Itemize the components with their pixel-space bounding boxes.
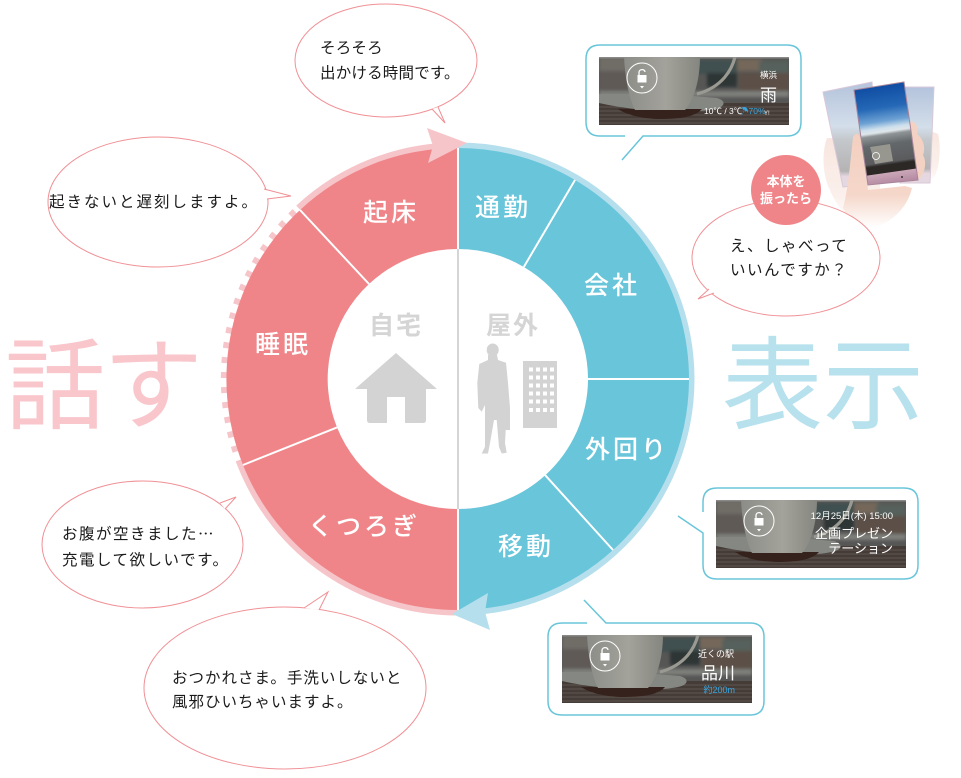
segment: 睡眠: 睡眠 <box>255 331 311 359</box>
ring: pink dashed sleep section <box>224 208 298 466</box>
segment: 移動: 移動 <box>498 533 554 561</box>
segment: 起床 <box>300 148 458 284</box>
callout: weather card: ☂70% <box>740 106 766 116</box>
icon: house <box>355 353 437 423</box>
icon: businessman <box>477 344 510 454</box>
ring: blue <box>458 146 692 612</box>
callout: station card: 近くの駅 <box>698 648 734 659</box>
bubble: そろそろ <box>295 4 477 123</box>
photo: hand holding phones <box>823 82 940 228</box>
arrow: top pink <box>427 128 467 163</box>
chart: daily cycle ring <box>224 128 691 630</box>
bubble: お腹が空きました: 充電して欲しいです。 <box>62 551 230 569</box>
segment: 移動 <box>458 475 613 610</box>
segment: 外回り: 外回り <box>585 436 669 464</box>
bubble: そろそろ: そろそろ <box>320 40 383 57</box>
badge: 本体を振ったら <box>751 155 821 225</box>
callout: weather card: Y! <box>764 111 770 117</box>
callout: weather card <box>586 45 801 160</box>
bubble: おつかれさま: 風邪ひいちゃいますよ。 <box>172 693 354 711</box>
label: 自宅: 自宅 <box>369 312 423 340</box>
segment: 会社: 会社 <box>584 272 640 300</box>
bubble: お腹が空きました <box>42 481 243 608</box>
bubble: え、しゃべって: え、しゃべって <box>730 238 848 255</box>
callout: schedule card <box>678 488 918 579</box>
bubble: おつかれさま: おつかれさま。手洗いしないと <box>172 669 402 687</box>
badge: 本体を振ったら: 振ったら <box>760 191 812 206</box>
callout: station card: 品川 <box>701 664 735 683</box>
callout: schedule card: 企画プレゼン <box>815 526 893 541</box>
title: 表示: 表示 <box>722 331 924 443</box>
callout: weather card: 雨 <box>760 86 777 105</box>
title: 話す: 話す <box>5 331 201 443</box>
segment: 通勤: 通勤 <box>475 194 531 222</box>
callout: weather card: 10℃ / 3℃ <box>704 106 743 116</box>
icon: building <box>523 361 557 428</box>
bubble: 起きないと遅刻しますよ <box>48 137 291 267</box>
callout: station card: 約200m <box>703 684 735 695</box>
bubble: 起きないと遅刻しますよ: 起きないと遅刻しますよ。 <box>49 193 259 211</box>
callout: weather card: 横浜 <box>760 70 777 80</box>
bubble: そろそろ: 出かける時間です。 <box>320 64 460 82</box>
callout: schedule card: 12月25日(木) 15:00 <box>811 510 893 522</box>
bubble: え、しゃべって: いいんですか？ <box>730 261 848 279</box>
label: 屋外: 屋外 <box>486 312 540 340</box>
segment: 起床: 起床 <box>363 199 419 227</box>
segment: 外回り <box>545 379 689 550</box>
segment: 通勤 <box>458 148 575 267</box>
badge: 本体を振ったら: 本体を <box>766 174 806 189</box>
segment: 会社 <box>524 180 689 379</box>
bubble: え、しゃべって <box>692 200 880 316</box>
bubble: お腹が空きました: お腹が空きました… <box>62 522 215 544</box>
callout: station card <box>548 600 764 715</box>
segment: くつろぎ: くつろぎ <box>308 513 420 541</box>
segment: 睡眠 <box>226 210 369 465</box>
segment: くつろぎ <box>243 427 458 610</box>
bubble: おつかれさま <box>144 592 426 769</box>
ring: pink solid upper <box>298 145 458 208</box>
center divider <box>457 249 459 509</box>
arrow: bottom blue <box>452 593 490 630</box>
callout: schedule card: テーション <box>828 541 893 556</box>
ring: pink solid lower <box>241 466 458 613</box>
